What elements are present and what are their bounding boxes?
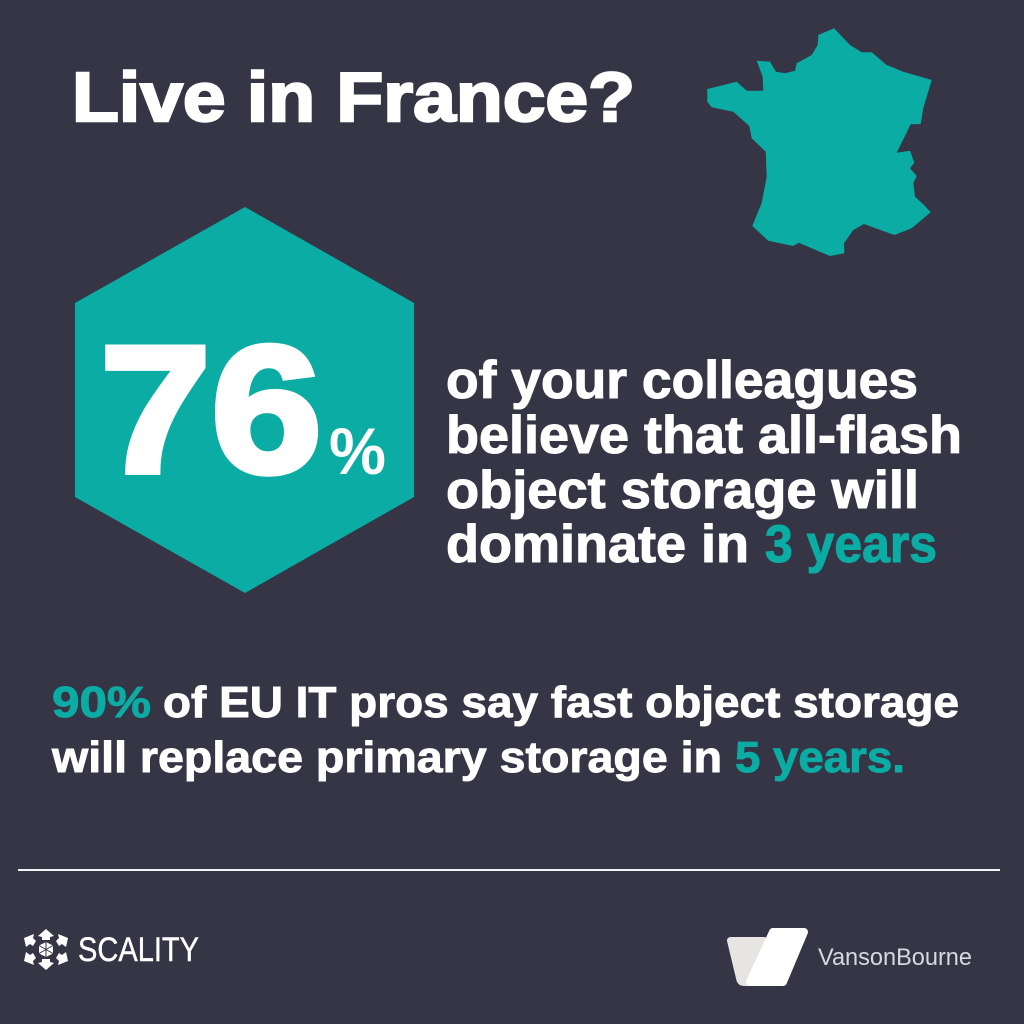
- stat description: object storage will: [446, 461, 919, 520]
- icon: VansonBourne folded mark: [730, 932, 804, 982]
- EU statistic text: 5 years.: [735, 733, 905, 782]
- stat description: 3 years: [765, 515, 937, 574]
- stat description: [446, 351, 962, 574]
- EU statistic text: [51, 678, 959, 782]
- EU statistic text: 90%: [52, 678, 151, 727]
- icon: map of France: [707, 28, 932, 256]
- stat description: dominate in: [446, 515, 749, 574]
- stat description: believe that all-flash: [446, 406, 962, 465]
- stat number: 76: [100, 309, 322, 511]
- logo: VansonBourne: [730, 932, 972, 982]
- title: Live in France?: [72, 58, 635, 136]
- stat description: of your colleagues: [446, 351, 918, 410]
- wordmark: VansonBourne: [818, 944, 972, 971]
- EU statistic text: will replace primary storage in: [51, 733, 722, 782]
- percent sign: %: [329, 414, 386, 488]
- icon: Scality hexagon arrows: [24, 929, 68, 970]
- logo: Scality: [24, 929, 199, 970]
- EU statistic text: of EU IT pros say fast object storage: [163, 678, 959, 727]
- hexagon stat badge: 76%: [75, 207, 414, 593]
- wordmark: SCALITY: [78, 931, 199, 969]
